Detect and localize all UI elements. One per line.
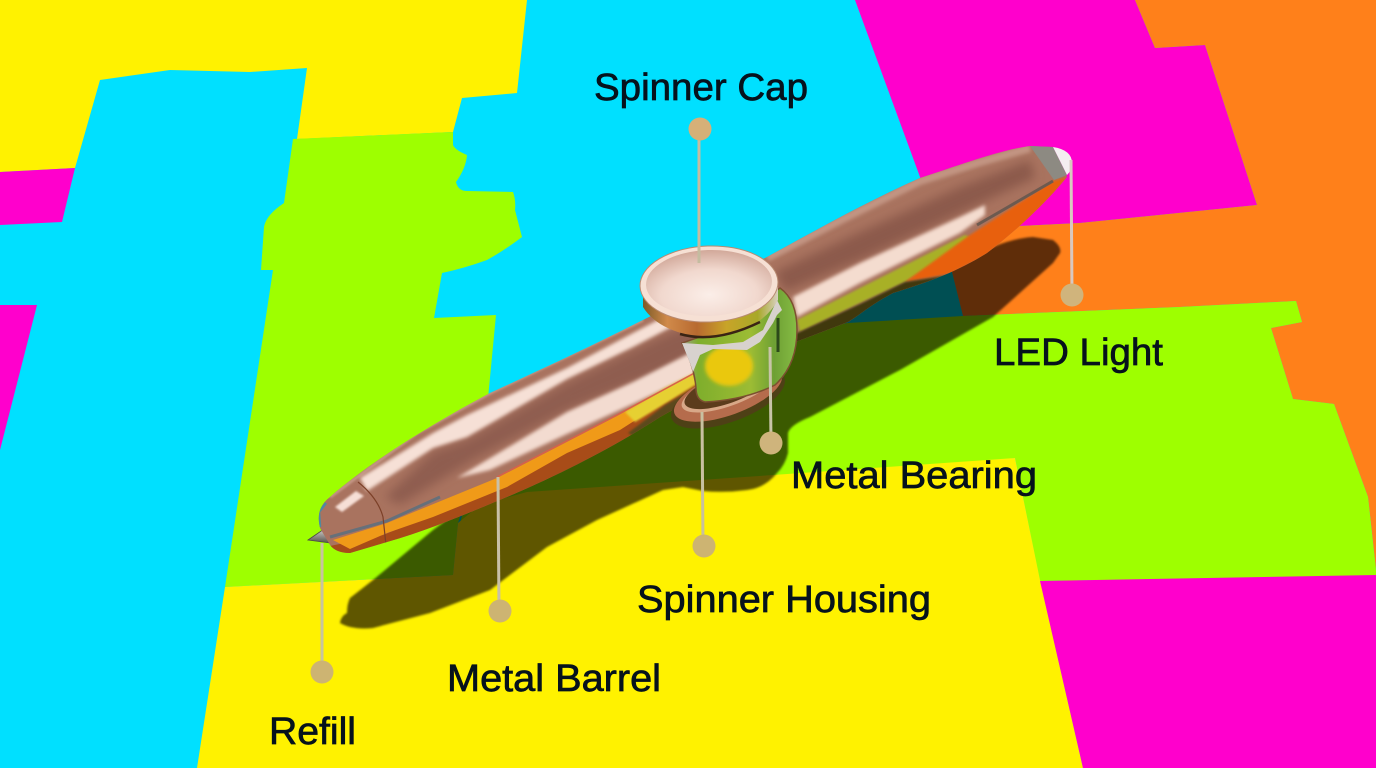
left barrel upper streak [358, 320, 672, 492]
housing dark seam [776, 318, 780, 352]
label: Metal Barrel: Metal Barrel [447, 658, 661, 700]
label: Spinner Cap: Spinner Cap [594, 67, 808, 109]
spinner cap face [645, 248, 773, 318]
spinner hub [639, 244, 797, 441]
metal barrel [319, 146, 1067, 553]
right barrel dark band [775, 160, 1035, 292]
LED light lens [1053, 147, 1072, 175]
label: Refill: Refill [269, 711, 356, 753]
right barrel green strip [797, 235, 975, 332]
pen cast shadow [340, 237, 1060, 628]
left barrel lower strips [330, 384, 695, 553]
housing yellow reflection [705, 346, 753, 386]
label: Metal Bearing: Metal Bearing [791, 455, 1037, 497]
LED light collar [1030, 146, 1067, 180]
leader: metal bearing [760, 347, 782, 454]
label: Spinner Housing: Spinner Housing [637, 579, 931, 621]
metal bearing ring [663, 355, 793, 441]
left barrel lower streak [457, 348, 700, 478]
leader: spinner cap [688, 118, 712, 263]
leader: LED light [1060, 160, 1084, 306]
leader: metal barrel [488, 477, 512, 622]
housing silver highlight [682, 300, 782, 372]
leader: spinner housing [692, 412, 716, 558]
refill tip [308, 527, 331, 543]
barrel reflections [319, 148, 1067, 556]
spinner housing [682, 288, 797, 402]
spinner cap rim [639, 244, 779, 324]
right barrel orange strip [905, 177, 1067, 282]
leader: refill [310, 543, 334, 684]
pen body [308, 146, 1072, 556]
cap lower shadow line [680, 322, 760, 337]
label: LED Light: LED Light [994, 332, 1163, 374]
right barrel light streak [793, 205, 985, 317]
cap underside band [643, 280, 778, 338]
left barrel dark band [385, 320, 700, 505]
